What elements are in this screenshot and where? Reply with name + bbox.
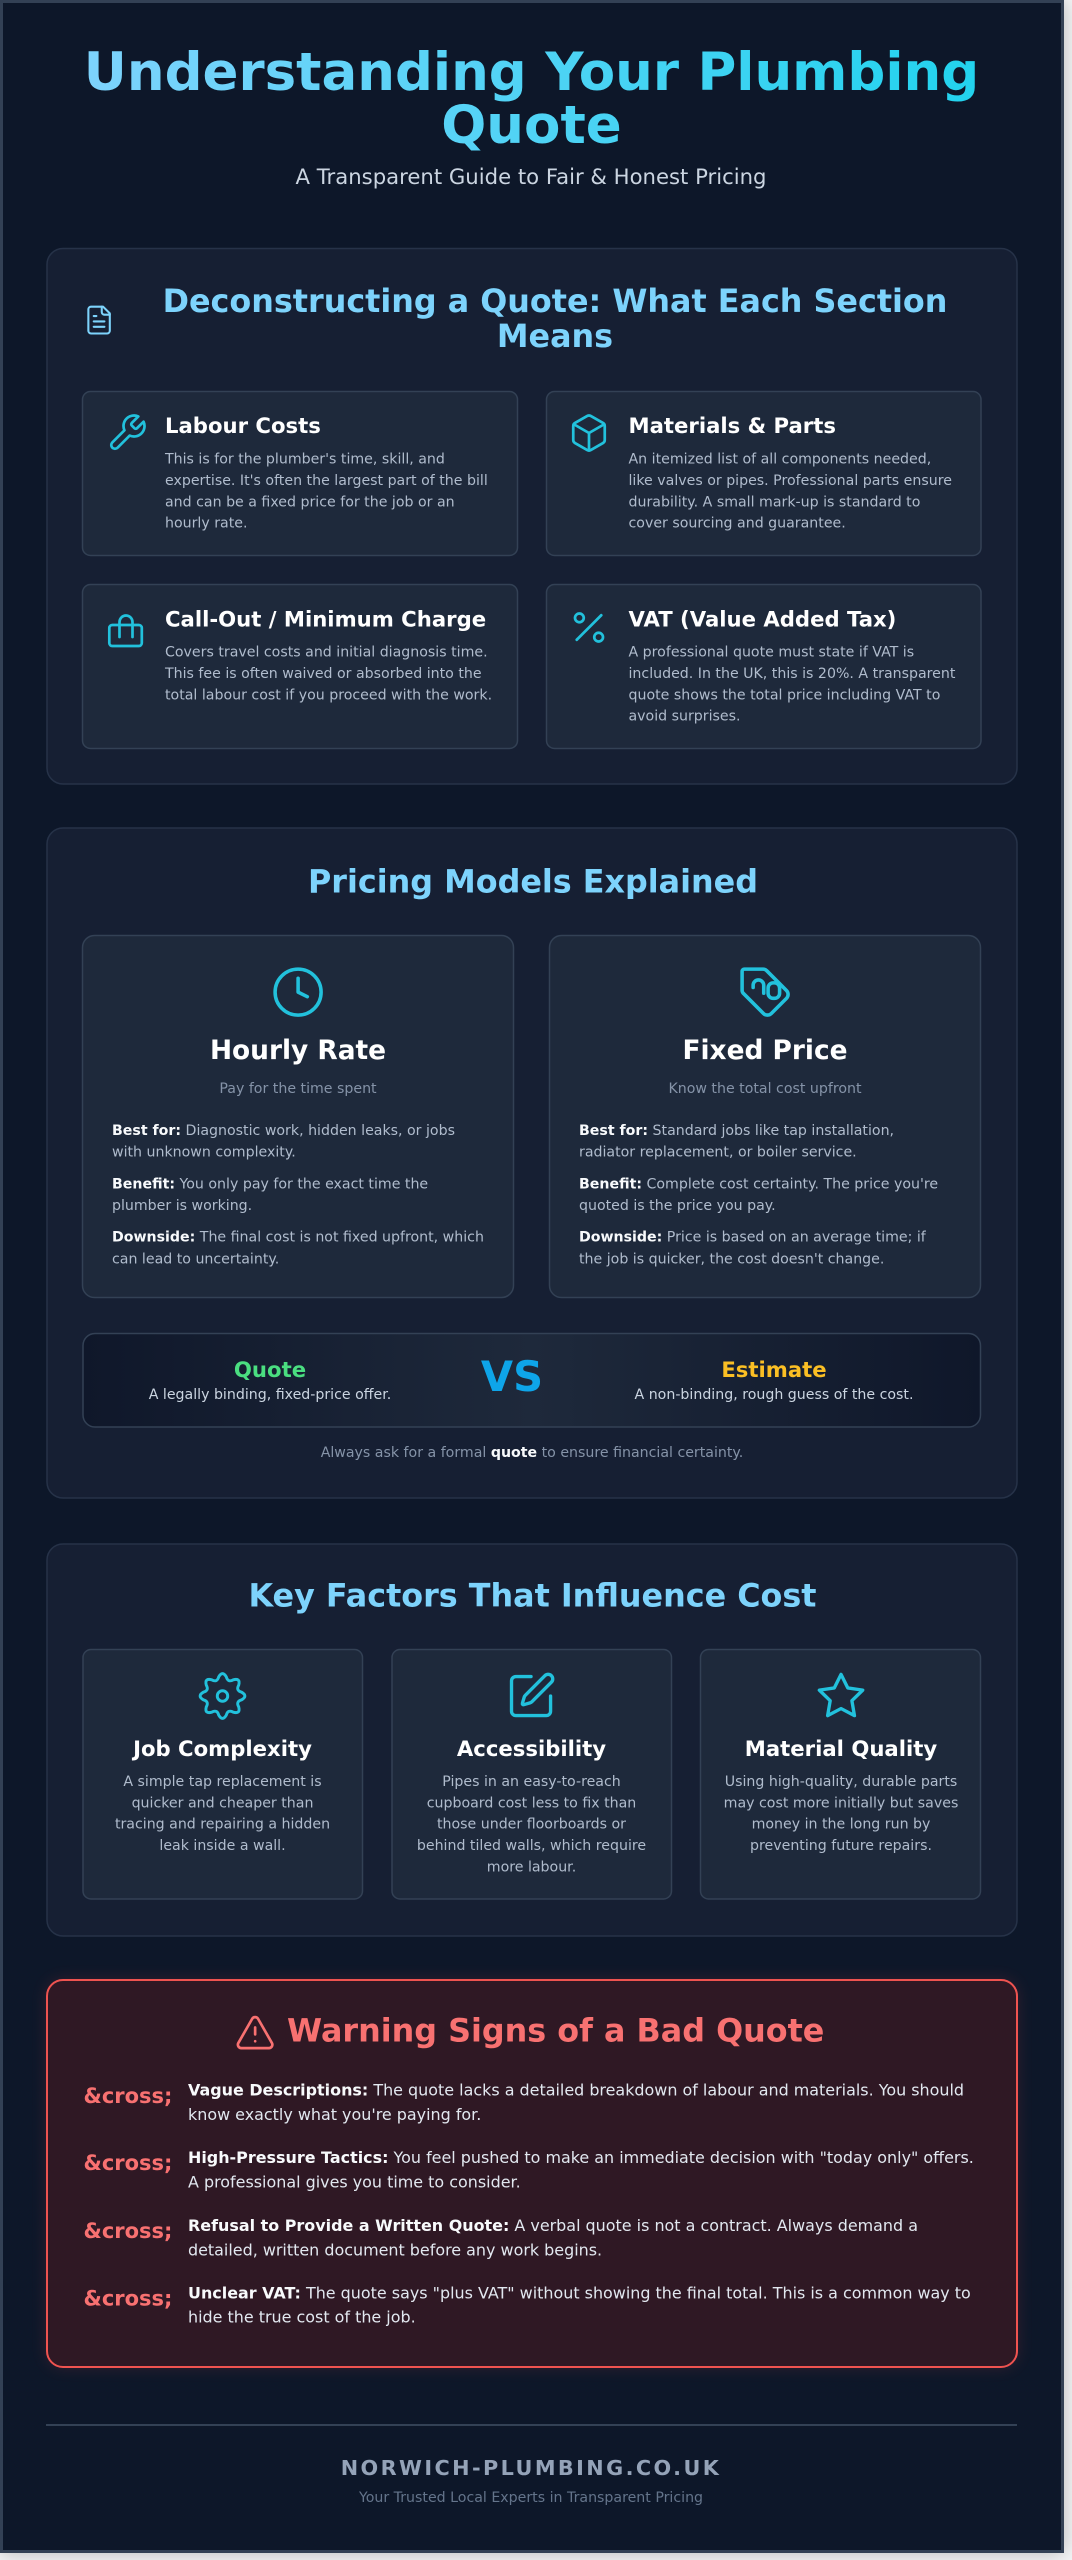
card: labour costs: hourly rate. bbox=[165, 516, 248, 532]
card: accessibility: more labour. bbox=[487, 1859, 576, 1875]
header: title and subtitle bbox=[84, 42, 979, 189]
card: fixed price: the job is quicker, the cost doesn't change. bbox=[579, 1251, 884, 1267]
card: materials and parts bbox=[546, 392, 981, 556]
card: fixed price: quoted is the price you pay. bbox=[579, 1198, 776, 1214]
icon: warning triangle bbox=[238, 2017, 272, 2048]
card: labour costs: and can be a fixed price for the job or an bbox=[165, 494, 455, 510]
subtitle: A Transparent Guide to Fair & Honest Pricing bbox=[295, 164, 767, 189]
warning: unclear VAT: Unclear VAT: The quote says "plus VAT" without showing the final total. This is a common way to bbox=[188, 2283, 971, 2302]
footer: NORWICH-PLUMBING.CO.UK bbox=[341, 2456, 721, 2480]
card: call-out charge: Call-Out / Minimum Charge bbox=[165, 607, 486, 632]
card: materials and parts: Materials & Parts bbox=[628, 413, 836, 438]
card: materials and parts: An itemized list of all components needed, bbox=[628, 452, 931, 468]
quote vs estimate comparison bbox=[83, 1334, 980, 1427]
icon: star bbox=[819, 1674, 863, 1716]
section heading: Pricing Models Explained bbox=[308, 864, 758, 900]
card: materials and parts: like valves or pipes. Professional parts ensure bbox=[628, 473, 952, 489]
card: VAT: quote shows the total price including VAT to bbox=[628, 687, 940, 703]
card: hourly rate: Benefit: You only pay for the exact time the bbox=[112, 1176, 428, 1192]
card: job complexity bbox=[83, 1650, 362, 1899]
section heading: Key Factors That Influence Cost bbox=[248, 1578, 817, 1614]
quote vs estimate comparison: VS bbox=[481, 1352, 543, 1401]
card: accessibility: Accessibility bbox=[457, 1736, 606, 1761]
card: labour costs: expertise. It's often the largest part of the bill bbox=[165, 473, 488, 489]
card: materials and parts: durability. A small mark-up is standard to bbox=[628, 494, 920, 510]
card: job complexity: quicker and cheaper than bbox=[132, 1795, 313, 1811]
card: accessibility bbox=[392, 1650, 672, 1899]
card: fixed price: Benefit: Complete cost certainty. The price you're bbox=[579, 1176, 938, 1192]
quote vs estimate comparison: Quote bbox=[234, 1357, 306, 1382]
title: Understanding Your Plumbing bbox=[84, 42, 979, 103]
card: materials and parts: cover sourcing and guarantee. bbox=[628, 516, 846, 532]
warning: unclear VAT bbox=[84, 2283, 971, 2327]
card: fixed price: Downside: Price is based on an average time; if bbox=[579, 1230, 926, 1246]
card: material quality: may cost more initially but saves bbox=[724, 1795, 958, 1811]
card: fixed price: Best for: Standard jobs like tap installation, bbox=[579, 1123, 894, 1139]
icon: document bbox=[88, 307, 110, 333]
card: accessibility: Pipes in an easy-to-reach bbox=[442, 1774, 621, 1790]
icon: box bbox=[573, 416, 605, 450]
card: material quality: Material Quality bbox=[745, 1736, 937, 1761]
warning: high pressure: High-Pressure Tactics: You feel pushed to make an immediate decision with "today only" offers. bbox=[188, 2148, 974, 2167]
card: fixed price bbox=[550, 936, 980, 1298]
warning: unclear VAT: hide the true cost of the job. bbox=[188, 2308, 416, 2327]
icon: gear bbox=[200, 1674, 245, 1718]
quote vs estimate comparison: A legally binding, fixed-price offer. bbox=[149, 1387, 391, 1403]
card: hourly rate: can lead to uncertainty. bbox=[112, 1251, 279, 1267]
card: accessibility: cupboard cost less to fix than bbox=[427, 1795, 636, 1811]
footer: Your Trusted Local Experts in Transparent Pricing bbox=[358, 2490, 703, 2506]
footer bbox=[341, 2456, 721, 2506]
warning: no written quote: &cross; bbox=[84, 2219, 172, 2243]
card: fixed price: Know the total cost upfront bbox=[668, 1081, 862, 1097]
warning: vague descriptions: Vague Descriptions: The quote lacks a detailed breakdown of labour and materials. You should bbox=[188, 2081, 964, 2100]
warning: unclear VAT: &cross; bbox=[84, 2286, 172, 2310]
card: hourly rate: with unknown complexity. bbox=[112, 1145, 296, 1161]
card: material quality: preventing future repairs. bbox=[750, 1838, 932, 1854]
icon: wrench bbox=[111, 415, 145, 449]
card: labour costs: This is for the plumber's time, skill, and bbox=[164, 452, 445, 468]
card: call-out charge bbox=[82, 584, 518, 748]
icon: percent bbox=[575, 614, 603, 642]
panel: pricing models bbox=[47, 828, 1017, 1498]
card: hourly rate: plumber is working. bbox=[112, 1198, 252, 1214]
quote vs estimate comparison: Estimate bbox=[721, 1357, 827, 1382]
icon: clock bbox=[275, 969, 321, 1015]
card: job complexity: A simple tap replacement is bbox=[123, 1774, 322, 1790]
warning: vague descriptions bbox=[84, 2081, 964, 2124]
icon: toolbox bbox=[109, 616, 142, 646]
panel: key factors bbox=[47, 1544, 1017, 1936]
warning: no written quote bbox=[84, 2216, 918, 2259]
card: job complexity: Job Complexity bbox=[131, 1736, 312, 1761]
card: fixed price: Fixed Price bbox=[682, 1035, 848, 1066]
card: VAT: avoid surprises. bbox=[628, 709, 740, 725]
card: fixed price: radiator replacement, or boiler service. bbox=[579, 1145, 857, 1161]
card: hourly rate: Pay for the time spent bbox=[219, 1081, 377, 1097]
card: accessibility: behind tiled walls, which require bbox=[417, 1838, 646, 1854]
card: job complexity: leak inside a wall. bbox=[159, 1838, 286, 1854]
panel: warning signs bbox=[47, 1980, 1017, 2367]
advice note: Always ask for a formal quote to ensure financial certainty. bbox=[321, 1445, 743, 1461]
panel: deconstructing a quote bbox=[47, 248, 1017, 784]
section heading: Warning Signs of a Bad Quote bbox=[287, 2013, 824, 2050]
icon: price tag bbox=[742, 969, 788, 1015]
card: labour costs: Labour Costs bbox=[165, 413, 321, 438]
card: material quality: money in the long run by bbox=[752, 1817, 930, 1833]
card: material quality: Using high-quality, durable parts bbox=[725, 1774, 957, 1790]
card: VAT: VAT (Value Added Tax) bbox=[628, 607, 896, 632]
section heading: Means bbox=[497, 318, 613, 355]
section heading: Deconstructing a Quote: What Each Section bbox=[163, 283, 947, 320]
card: hourly rate: Best for: Diagnostic work, hidden leaks, or jobs bbox=[112, 1123, 455, 1139]
card: hourly rate: Downside: The final cost is not fixed upfront, which bbox=[112, 1230, 484, 1246]
card: material quality bbox=[700, 1650, 980, 1899]
card: VAT bbox=[546, 584, 981, 748]
card: call-out charge: This fee is often waived or absorbed into the bbox=[164, 666, 482, 682]
card: job complexity: tracing and repairing a hidden bbox=[115, 1817, 330, 1833]
card: call-out charge: Covers travel costs and initial diagnosis time. bbox=[165, 645, 488, 661]
card: call-out charge: total labour cost if you proceed with the work. bbox=[165, 687, 492, 703]
card: VAT: included. In the UK, this is 20%. A transparent bbox=[628, 666, 956, 682]
warning: no written quote: detailed, written document before any work begins. bbox=[188, 2240, 602, 2259]
warning: high pressure: A professional gives you time to consider. bbox=[188, 2172, 521, 2191]
icon: pencil square bbox=[512, 1674, 553, 1716]
card: accessibility: those under floorboards or bbox=[437, 1817, 626, 1833]
card: hourly rate: Hourly Rate bbox=[210, 1035, 386, 1066]
card: labour costs bbox=[82, 392, 518, 556]
warning: vague descriptions: &cross; bbox=[84, 2084, 172, 2108]
warning: no written quote: Refusal to Provide a Written Quote: A verbal quote is not a contract. Always demand a bbox=[188, 2216, 918, 2235]
card: VAT: A professional quote must state if VAT is bbox=[628, 645, 914, 661]
warning: vague descriptions: know exactly what you're paying for. bbox=[188, 2105, 481, 2124]
title: Quote bbox=[441, 95, 622, 156]
warning: high pressure: &cross; bbox=[84, 2151, 172, 2175]
card: hourly rate bbox=[82, 936, 514, 1298]
warning: high pressure bbox=[84, 2148, 974, 2191]
quote vs estimate comparison: A non-binding, rough guess of the cost. bbox=[635, 1387, 913, 1403]
